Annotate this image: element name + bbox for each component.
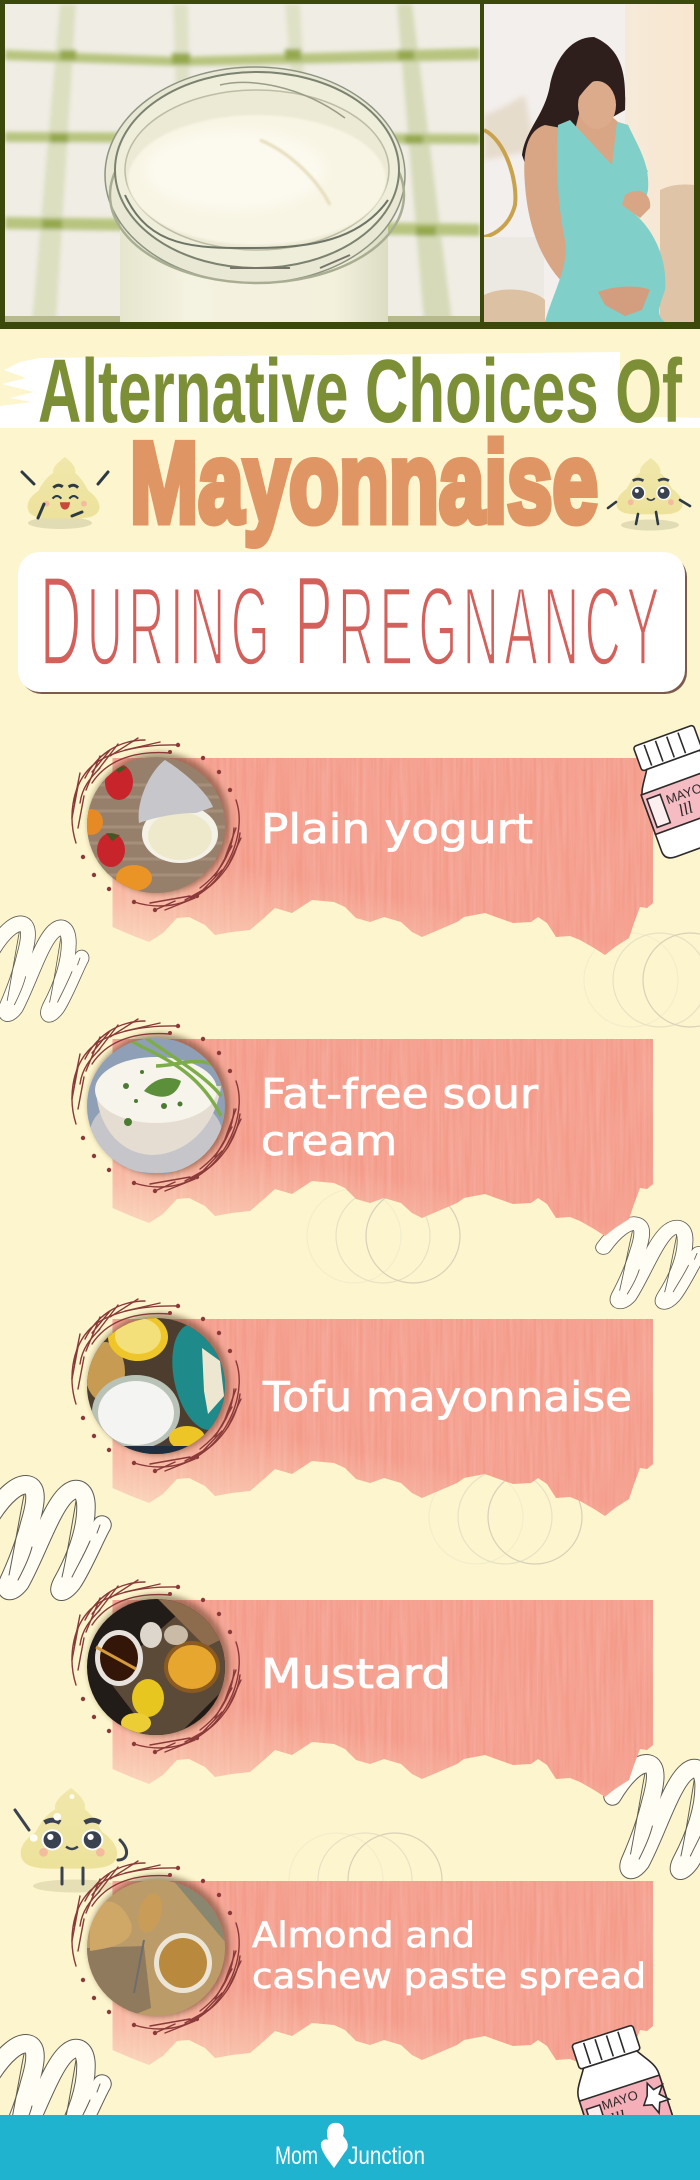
background rings 2 xyxy=(307,1189,460,1283)
card 5 label: Almond and xyxy=(252,1916,475,1956)
mascot: waving mayo right xyxy=(608,458,690,530)
card 2 photo: bowl of sour cream with herbs xyxy=(86,1036,226,1176)
card 4 photo: mustard, honey and lemon xyxy=(86,1597,226,1737)
card 3 photo: tofu, lemon, chickpeas and teal bowl xyxy=(87,1318,225,1454)
background rings 4 xyxy=(289,1833,442,1927)
doodle: mayo jar bottom right xyxy=(562,2021,680,2160)
scribble left 5 xyxy=(0,2044,102,2150)
card 1 circle shadow xyxy=(88,752,230,894)
card 5 brush panel xyxy=(112,1881,653,2078)
mascot: mayo pointing up xyxy=(15,1788,127,1892)
mascot: happy mayo left xyxy=(22,457,108,529)
card 5: almond and cashew paste spread xyxy=(72,1861,653,2078)
card 5 label second line: cashew paste spread xyxy=(252,1957,646,1997)
card 4 brush panel xyxy=(112,1600,653,1797)
logo icon: mother and heart xyxy=(321,2123,348,2168)
doodle: mayo jar bottom right: lll xyxy=(608,2106,628,2130)
background rings 3 xyxy=(429,1470,582,1564)
card 5 photo: nut paste on bread and bowl xyxy=(86,1878,226,2018)
card 2: fat-free sour cream xyxy=(72,1019,653,1236)
logo word Mom: Mom xyxy=(275,2142,318,2170)
card 3 wreath xyxy=(72,1299,241,1473)
card 4: mustard xyxy=(72,1580,653,1797)
subtitle box xyxy=(18,552,687,694)
scribble right 2 xyxy=(604,1224,699,1302)
doodle: mayo jar top right: lll xyxy=(676,798,696,820)
card 2 circle shadow xyxy=(88,1033,230,1175)
card 3 label: Tofu mayonnaise xyxy=(262,1373,632,1421)
doodle: mayo jar bottom right: MAYO xyxy=(600,2087,640,2113)
card 2 brush panel xyxy=(112,1039,653,1236)
photo: jar of mayonnaise on checked cloth xyxy=(5,4,480,325)
logo word Junction: Junction xyxy=(348,2142,425,2170)
card 2 label second line: cream xyxy=(261,1117,397,1165)
scribble left 1 xyxy=(0,924,82,1014)
footer logo xyxy=(275,2123,425,2170)
card 4 wreath xyxy=(72,1580,241,1754)
footer band xyxy=(0,2115,700,2180)
card 5 wreath xyxy=(72,1861,241,2035)
card 3: tofu mayonnaise xyxy=(72,1299,653,1516)
card 1 wreath xyxy=(72,738,241,912)
card 1: plain yogurt xyxy=(72,738,653,955)
card 1 photo: yogurt, strawberries and orange xyxy=(79,755,226,895)
photo: pregnant woman in aqua dress xyxy=(484,4,695,322)
photo frame with two header photos xyxy=(0,0,700,329)
doodle: mayo jar top right xyxy=(625,721,700,861)
card 2 wreath xyxy=(72,1019,241,1193)
scribble left 3 xyxy=(0,1485,102,1591)
card 2 label: Fat-free sour xyxy=(261,1070,538,1118)
card 1 label: Plain yogurt xyxy=(261,805,533,853)
title band: white brush stroke xyxy=(0,352,700,428)
background rings 1 xyxy=(584,933,700,1027)
scribble right 4 xyxy=(612,1764,700,1870)
card 3 brush panel xyxy=(112,1319,653,1516)
card 5 circle shadow xyxy=(88,1875,230,2017)
card 1 brush panel xyxy=(112,758,653,955)
card 4 label: Mustard xyxy=(261,1650,451,1698)
card 4 circle shadow xyxy=(88,1594,230,1736)
card 3 circle shadow xyxy=(88,1313,230,1455)
